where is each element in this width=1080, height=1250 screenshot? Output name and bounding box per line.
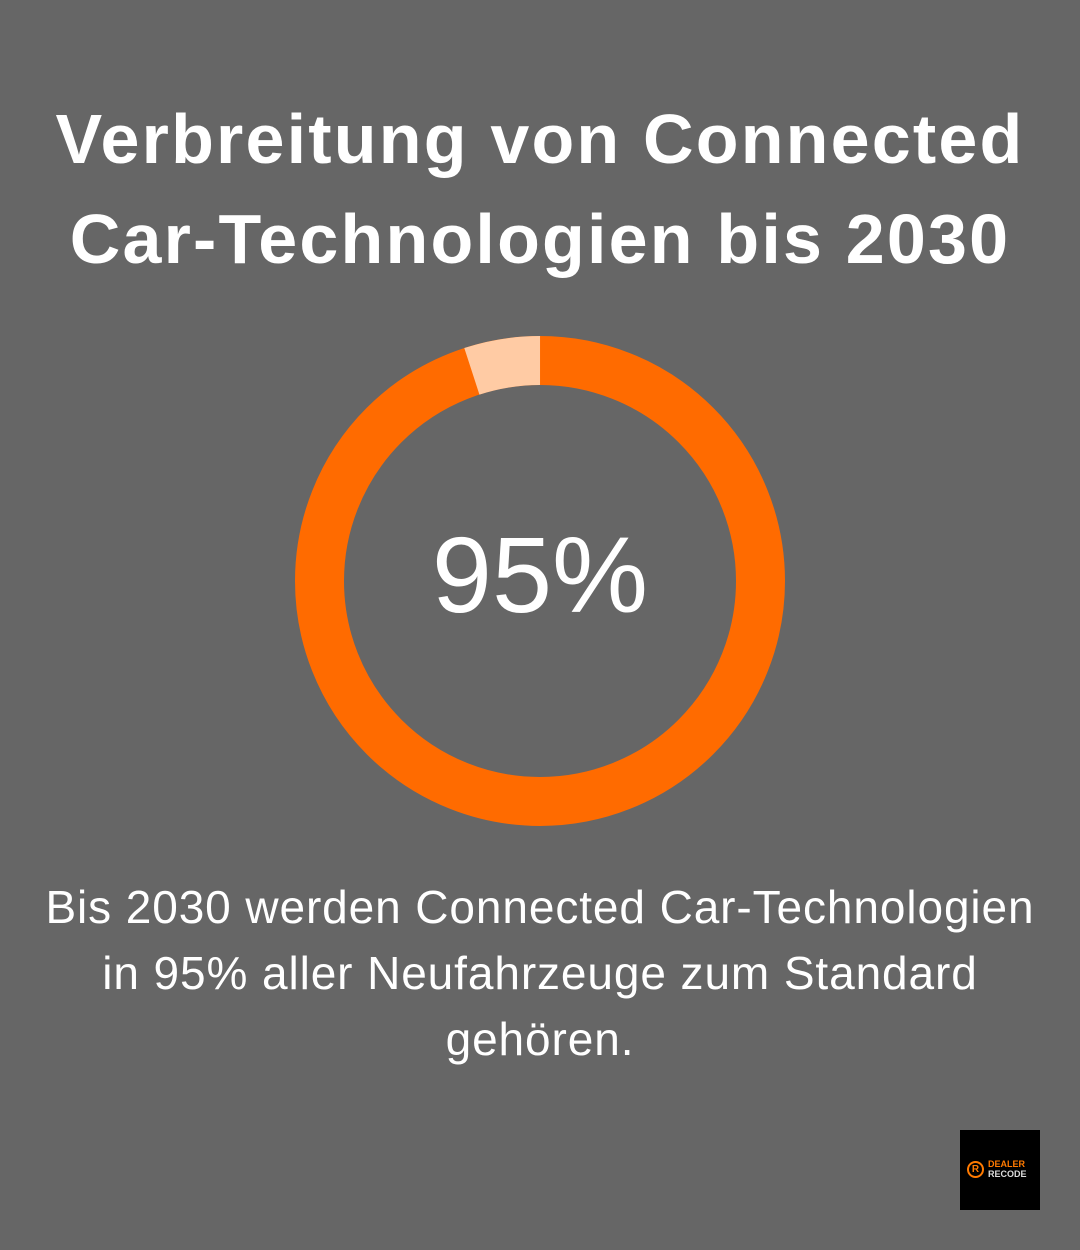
donut chart: 95%	[432, 514, 648, 635]
description text: gehören.	[446, 1013, 634, 1065]
logo: Dealer Recode: RECODE	[988, 1169, 1027, 1179]
logo: Dealer Recode: DEALER	[988, 1159, 1025, 1169]
logo: Dealer Recode: R	[972, 1164, 979, 1175]
logo: Dealer Recode	[960, 1130, 1040, 1210]
description text: in 95% aller Neufahrzeuge zum Standard	[102, 947, 978, 999]
title	[56, 100, 1024, 278]
title: Car-Technologien bis 2030	[70, 200, 1010, 278]
description text: Bis 2030 werden Connected Car-Technologien	[45, 881, 1035, 933]
description text	[45, 881, 1035, 1065]
title: Verbreitung von Connected	[56, 100, 1024, 178]
